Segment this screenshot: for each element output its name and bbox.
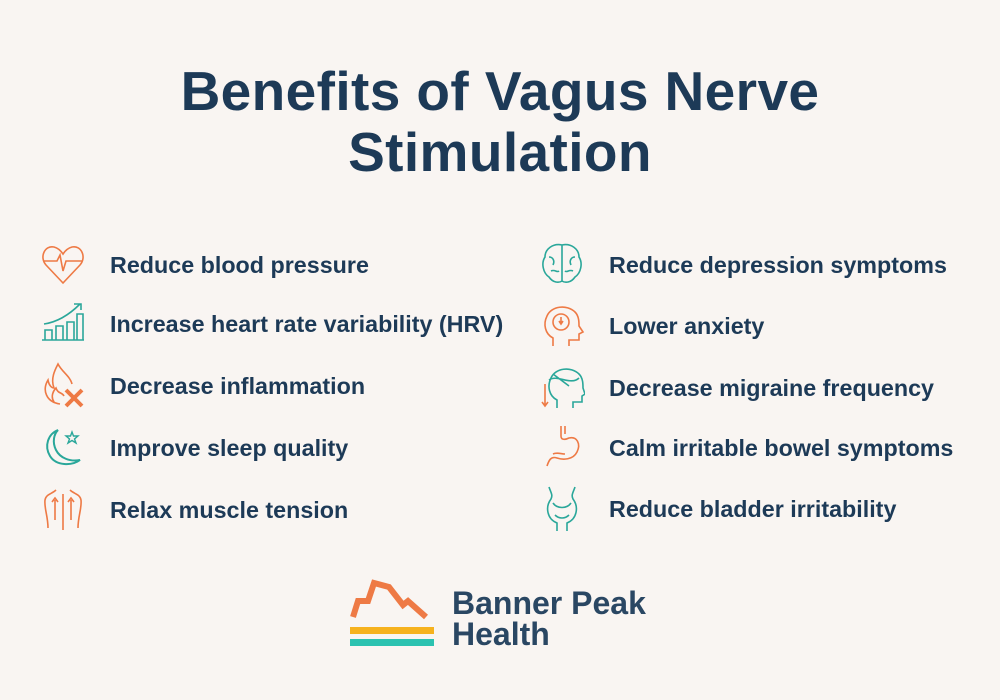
icon: chart	[42, 303, 84, 341]
item: HRV: Increase heart rate variability (HRV)	[110, 311, 503, 337]
item: blood pressure: Reduce blood pressure	[110, 252, 369, 278]
item: muscle	[44, 489, 348, 530]
item: migraine: Decrease migraine frequency	[609, 375, 934, 401]
item: depression: Reduce depression symptoms	[609, 252, 947, 278]
item: bowel: Calm irritable bowel symptoms	[609, 435, 953, 461]
logo text: Health	[452, 616, 550, 652]
item: blood pressure	[42, 246, 369, 284]
item: HRV	[42, 303, 503, 341]
item: inflammation	[44, 362, 365, 408]
icon: back	[44, 489, 82, 530]
item: bowel	[546, 426, 953, 466]
item: sleep	[46, 429, 348, 466]
item: migraine	[541, 368, 934, 408]
item: bladder	[546, 486, 896, 531]
logo text	[452, 585, 646, 652]
icon: head	[544, 306, 584, 346]
item: muscle: Relax muscle tension	[110, 497, 348, 523]
icon: heart	[42, 246, 84, 284]
logo	[350, 579, 646, 652]
icon: bladder	[546, 486, 578, 531]
title: Benefits of Vagus Nerve	[181, 60, 819, 122]
icon: brain	[542, 244, 582, 283]
item: bladder: Reduce bladder irritability	[609, 496, 896, 522]
icon: stomach	[546, 426, 580, 466]
item: anxiety: Lower anxiety	[609, 313, 764, 339]
icon: head arrows	[541, 368, 585, 408]
icon: fire	[44, 362, 84, 408]
item: inflammation: Decrease inflammation	[110, 373, 365, 399]
title: Stimulation	[348, 121, 652, 183]
item: anxiety	[544, 306, 764, 346]
icon: moon	[46, 429, 81, 466]
logo mark	[350, 579, 434, 646]
item: depression	[542, 244, 947, 283]
title	[181, 60, 819, 183]
item: sleep: Improve sleep quality	[110, 435, 348, 461]
logo text: Banner Peak	[452, 585, 646, 621]
